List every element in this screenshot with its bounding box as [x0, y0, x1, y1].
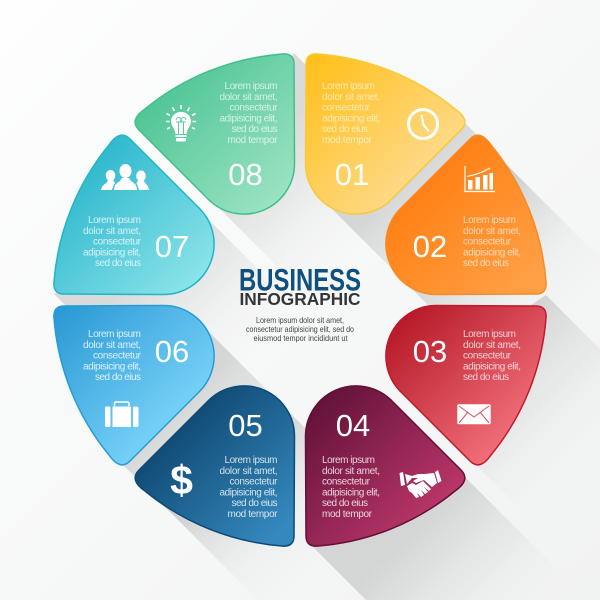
icon: people	[101, 164, 149, 190]
icon: bar chart	[465, 166, 495, 192]
text 05: sed do eius	[232, 498, 278, 509]
text 01	[322, 81, 380, 146]
text 04	[322, 455, 380, 520]
title: INFOGRAPHIC	[240, 289, 361, 309]
icon: envelope	[457, 404, 491, 424]
text 06: consectetur	[93, 350, 142, 362]
text 06: sed do eius	[95, 372, 141, 383]
number 03: 03	[413, 334, 447, 369]
text 02: dolor sit amet,	[463, 226, 521, 237]
panel 04	[305, 386, 465, 546]
number 07: 07	[155, 229, 189, 264]
text 05: mod tempor	[228, 509, 278, 520]
text 05	[220, 455, 278, 520]
text 06: dolor sit amet,	[83, 340, 141, 351]
text 06	[83, 329, 142, 383]
text 07	[83, 215, 142, 269]
center description: Lorem ipsum dolor sit amet,	[256, 315, 344, 325]
text 02: adipisicing elit,	[463, 248, 521, 258]
panel 05	[135, 386, 295, 546]
text 01: adipisicing elit,	[322, 114, 380, 124]
text 06: adipisicing elit,	[83, 362, 141, 372]
text 01: consectetur	[322, 102, 371, 114]
number 08: 08	[228, 157, 263, 192]
text 08: mod tempor	[228, 135, 278, 146]
text 01: mod tempor	[322, 135, 373, 146]
number 02: 02	[413, 229, 447, 264]
text 04: mod tempor	[322, 509, 373, 520]
text 02: consectetur	[463, 236, 512, 248]
number 04: 04	[336, 408, 370, 443]
text 07: consectetur	[93, 236, 142, 248]
text 03: consectetur	[463, 350, 512, 362]
icon: handshake	[400, 470, 442, 498]
text 04: Lorem ipsum	[322, 455, 375, 466]
text 02	[463, 215, 521, 269]
panel 03	[386, 305, 546, 465]
text 06: Lorem ipsum	[88, 329, 141, 340]
title: BUSINESS	[239, 262, 361, 298]
icon: dollar: $	[170, 457, 193, 503]
text 08: adipisicing elit,	[220, 114, 278, 124]
text 04: consectetur	[322, 476, 371, 488]
panel 08	[135, 54, 295, 214]
text 01: dolor sit amet,	[322, 92, 380, 103]
text 05: Lorem ipsum	[224, 455, 278, 466]
text 08: Lorem ipsum	[224, 81, 278, 92]
text 02: sed do eius	[463, 258, 509, 269]
title	[239, 262, 361, 309]
text 07: sed do eius	[95, 258, 141, 269]
text 07: adipisicing elit,	[83, 248, 141, 258]
center description	[246, 315, 354, 343]
text 01: Lorem ipsum	[322, 81, 375, 92]
text 08: sed do eius	[232, 124, 278, 135]
text 08: consectetur	[230, 102, 278, 114]
icon: clock	[408, 110, 438, 138]
text 07: dolor sit amet,	[83, 226, 141, 237]
panel 02	[386, 135, 546, 295]
center description: eiusmod tempor incididunt ut	[254, 333, 348, 343]
panel 07	[54, 135, 214, 295]
icon: light bulb	[166, 105, 196, 142]
text 03: sed do eius	[463, 372, 509, 383]
icon: briefcase	[105, 402, 138, 427]
text 03	[463, 329, 521, 383]
number 05: 05	[228, 408, 263, 443]
text 04: sed do eius	[322, 498, 368, 509]
text 03: dolor sit amet,	[463, 340, 521, 351]
text 03: adipisicing elit,	[463, 362, 521, 372]
text 05: dolor sit amet,	[220, 466, 278, 477]
text 02: Lorem ipsum	[463, 215, 516, 226]
text 03: Lorem ipsum	[463, 329, 516, 340]
text 01: sed do eius	[322, 124, 368, 135]
text 07: Lorem ipsum	[88, 215, 141, 226]
text 08	[220, 81, 278, 146]
center description: consectetur adipisicing elit, sed do	[246, 324, 354, 334]
number 06: 06	[155, 334, 189, 369]
number 01: 01	[335, 157, 369, 192]
panel 01	[305, 54, 465, 214]
text 04: adipisicing elit,	[322, 488, 380, 498]
text 05: adipisicing elit,	[220, 488, 278, 498]
text 04: dolor sit amet,	[322, 466, 380, 477]
text 05: consectetur	[230, 476, 278, 488]
text 08: dolor sit amet,	[220, 92, 278, 103]
panel 06	[54, 305, 214, 465]
